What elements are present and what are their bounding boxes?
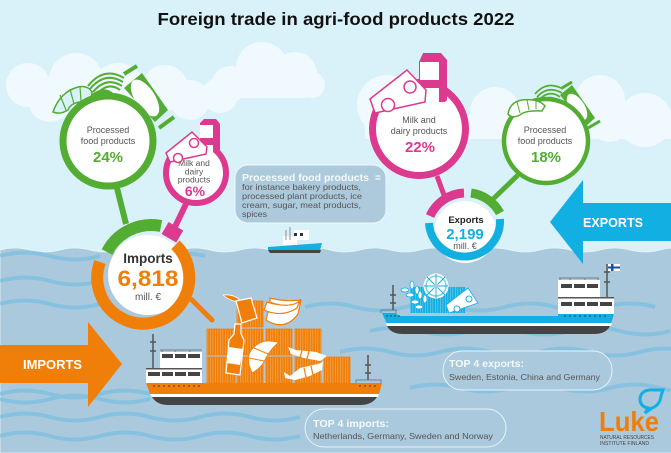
panel: processed food definition: cream, sugar, meat products,	[242, 200, 361, 210]
icon: finnish flag	[608, 264, 620, 271]
panel: top 4 exports	[443, 351, 612, 390]
waves	[0, 252, 671, 440]
icon: jar and bread, imports	[53, 66, 174, 128]
panel: top 4 imports: Netherlands, Germany, Sweden and Norway	[313, 431, 494, 441]
panel: processed food definition	[235, 165, 386, 223]
logo: Luke	[599, 390, 663, 447]
panel: processed food definition: processed plant products, ice	[242, 191, 362, 201]
panel: imports total ring: 6,818	[118, 266, 178, 291]
panel: top 4 exports: TOP 4 exports:	[449, 359, 524, 370]
panel: top 4 imports	[305, 409, 506, 447]
icon: grain, citrus and cheese cargo	[401, 274, 478, 313]
logo: Luke: NATURAL RESOURCES	[600, 435, 654, 441]
icon: bottle	[226, 324, 244, 375]
small ship	[268, 227, 322, 253]
panel: processed food definition: for instance bakery products,	[242, 182, 361, 192]
panel: exports total ring: Exports	[448, 215, 484, 226]
panel: top 4 imports: TOP 4 imports:	[313, 419, 389, 430]
panel: milk and dairy 22%: Milk and	[402, 115, 436, 125]
panel: processed food definition: =	[375, 173, 381, 184]
imports connectors	[117, 188, 212, 320]
panel: milk and dairy 6%: 6%	[185, 183, 206, 199]
logo: Luke: INSTITUTE FINLAND	[600, 441, 649, 447]
panel: milk and dairy 6%: products	[178, 174, 210, 184]
panel: imports total ring	[97, 222, 189, 324]
clouds	[6, 42, 671, 147]
icon: croissant, exports	[508, 100, 545, 117]
sea	[0, 248, 671, 453]
icon: croissant	[248, 341, 279, 373]
panel: processed food definition: Processed food products	[242, 172, 369, 184]
panel: processed food products 24%	[63, 96, 153, 186]
icon: milk and cheese, exports	[370, 53, 447, 113]
containers	[207, 301, 350, 383]
panel: milk and dairy 22%: 22%	[405, 139, 435, 156]
arrow: imports: IMPORTS	[23, 358, 82, 372]
panel: milk and dairy 6%: Milk and	[178, 158, 210, 168]
exports connectors	[437, 175, 518, 201]
panel: processed food products 18%	[504, 99, 588, 183]
icon: can	[223, 295, 257, 323]
import ship	[146, 295, 382, 405]
panel: milk and dairy 6%	[166, 143, 226, 203]
panel: milk and dairy 22%: dairy products	[391, 126, 448, 136]
icon: milk and cheese, imports	[166, 119, 220, 162]
panel: exports total ring: mill. €	[453, 241, 477, 251]
logo: Luke: Luke	[599, 406, 659, 437]
icon: bananas	[264, 298, 301, 325]
panel: processed food products 24%: 24%	[93, 149, 123, 166]
panel: milk and dairy 22%	[372, 82, 466, 176]
panel: imports total ring: mill. €	[135, 292, 161, 303]
arrow: imports	[0, 322, 122, 407]
panel: exports total ring	[429, 193, 500, 263]
panel: processed food products 18%: 18%	[531, 149, 561, 166]
export ship	[381, 264, 620, 334]
icon: jar and bread, exports	[535, 82, 600, 128]
panel: processed food products 18%: Processed	[524, 125, 566, 135]
arrow: exports: EXPORTS	[583, 216, 643, 230]
panel: processed food products 18%: food products	[518, 136, 573, 146]
arrow: exports	[550, 180, 671, 264]
panel: milk and dairy 6%: dairy	[185, 166, 204, 176]
panel: processed food products 24%: food products	[81, 136, 136, 146]
panel: processed food definition: spices	[242, 209, 267, 219]
icon: shrimps	[284, 347, 327, 380]
panel: imports total ring: Imports	[123, 251, 173, 266]
panel: processed food products 24%: Processed	[87, 125, 129, 135]
panel: exports total ring: 2,199	[446, 226, 484, 243]
title: Foreign trade in agri-food products 2022	[158, 9, 515, 29]
panel: top 4 exports: Sweden, Estonia, China and Germany	[449, 372, 601, 382]
